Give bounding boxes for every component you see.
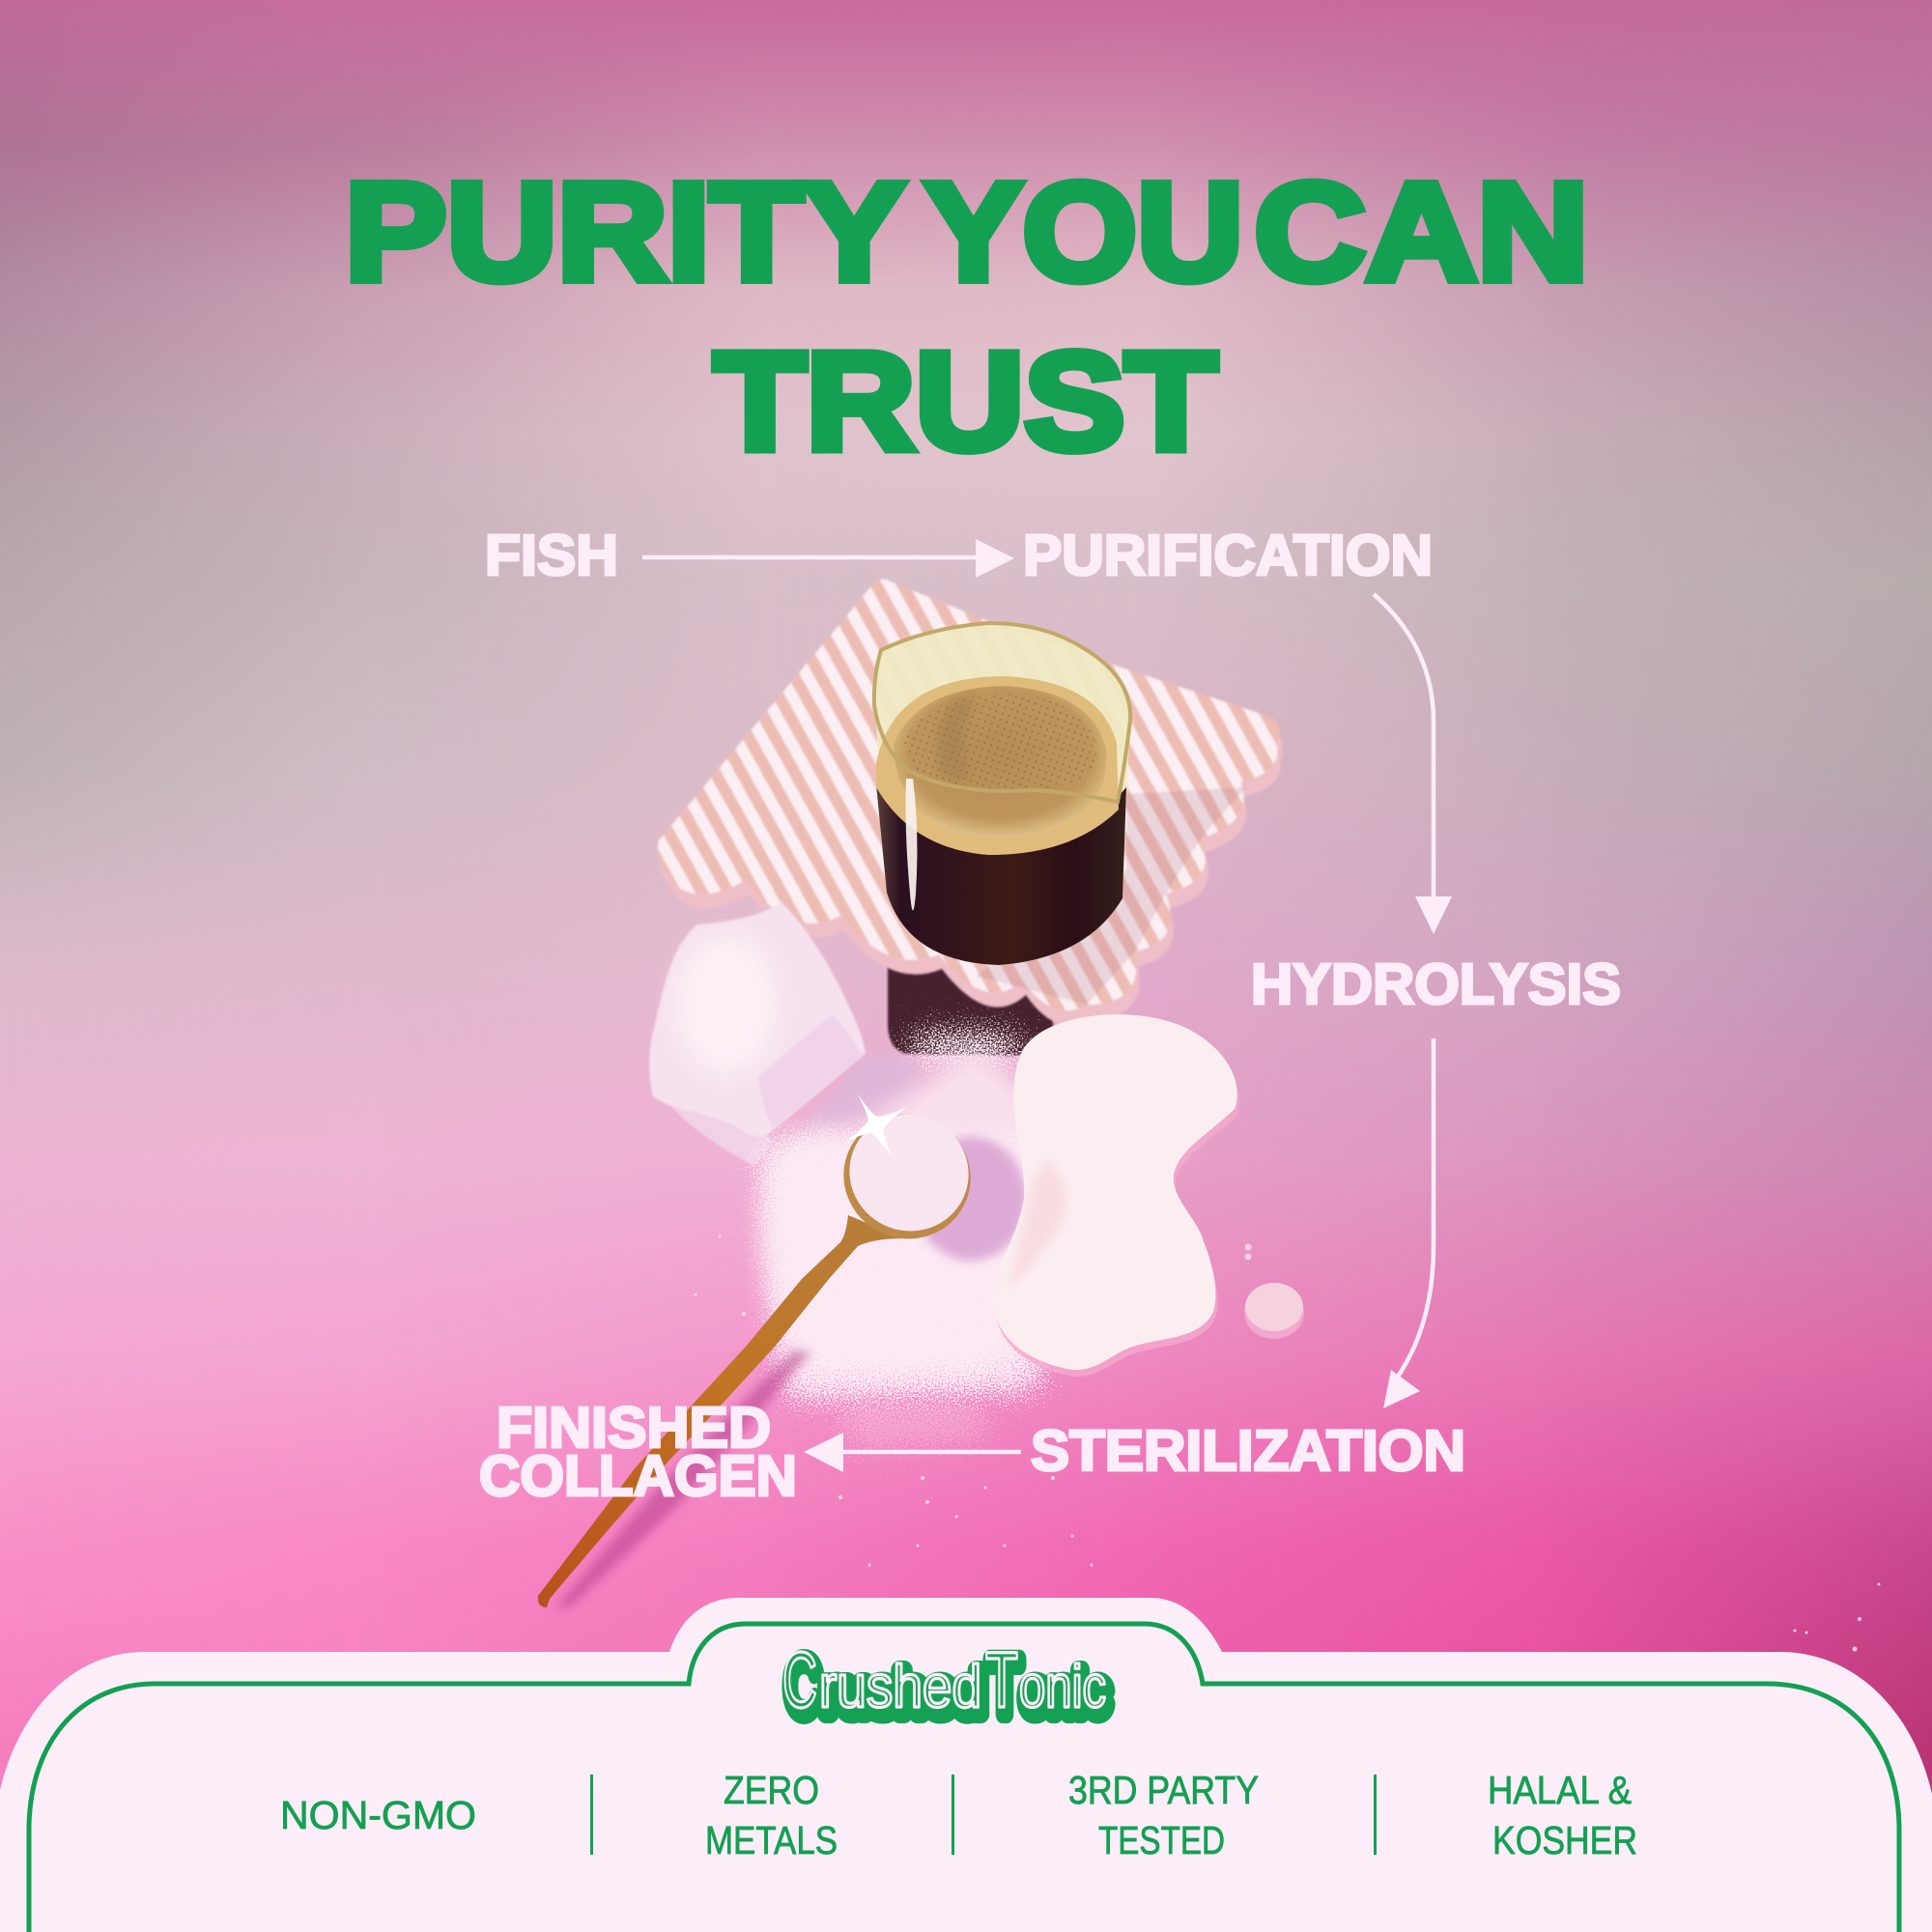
panel outline bbox=[29, 1624, 1899, 1932]
copper spoon bbox=[538, 1094, 991, 1607]
title bbox=[345, 155, 1588, 479]
blob shadow bbox=[787, 1055, 918, 1150]
title: TRUST bbox=[714, 324, 1217, 479]
logo: rushed bbox=[822, 1661, 984, 1727]
milk puddle bbox=[993, 1014, 1239, 1377]
badge: 3rd party tested bbox=[1068, 1768, 1259, 1862]
logo: T bbox=[985, 1636, 1018, 1724]
spoon shadow bbox=[555, 1137, 1027, 1607]
step: purification: PURIFICATION bbox=[1023, 524, 1433, 587]
badge: zero metals: ZERO bbox=[724, 1768, 819, 1812]
step: finished collagen bbox=[479, 1396, 797, 1508]
badge: halal and kosher bbox=[1488, 1768, 1637, 1862]
logo: C bbox=[782, 1636, 817, 1724]
small milk drop bbox=[1244, 1244, 1304, 1339]
shadow on coaster bbox=[976, 787, 1246, 1005]
title: PURITY bbox=[345, 155, 905, 309]
step: finished collagen: COLLAGEN bbox=[479, 1444, 797, 1508]
badge: 3rd party tested: TESTED bbox=[1098, 1818, 1225, 1862]
step: finished collagen: FINISHED bbox=[497, 1396, 771, 1460]
scattered powder grains bbox=[694, 1235, 1880, 1652]
badge: zero metals bbox=[705, 1768, 838, 1862]
arrow: purification to hydrolysis bbox=[1374, 594, 1452, 934]
panel: certifications bbox=[0, 1598, 1932, 1932]
badge: halal and kosher: HALAL & bbox=[1488, 1768, 1632, 1812]
step: hydrolysis: HYDROLYSIS bbox=[1251, 952, 1621, 1016]
title: CAN bbox=[1254, 155, 1588, 309]
upper glass bbox=[875, 623, 1130, 965]
arrow: sterilization to finished collagen bbox=[804, 1433, 1021, 1472]
badge: halal and kosher: KOSHER bbox=[1492, 1818, 1637, 1862]
logo: T bbox=[988, 1643, 1021, 1731]
step: sterilization: STERILIZATION bbox=[1031, 1419, 1465, 1483]
title: YOU bbox=[924, 155, 1243, 309]
badge: zero metals: METALS bbox=[705, 1818, 838, 1862]
badge: non-gmo: NON-GMO bbox=[280, 1793, 476, 1837]
logo: rushed bbox=[819, 1654, 981, 1720]
logo bbox=[782, 1636, 1109, 1731]
badge: 3rd party tested: 3RD PARTY bbox=[1068, 1768, 1259, 1812]
whipped cream blob bbox=[649, 902, 866, 1166]
step: fish: FISH bbox=[485, 524, 618, 587]
powder spill bbox=[749, 1053, 1053, 1459]
arrow: hydrolysis to sterilization bbox=[1383, 1038, 1434, 1408]
dark reflection under glass bbox=[888, 952, 1053, 1072]
panel background bbox=[0, 1598, 1932, 1932]
logo: onic bbox=[1019, 1654, 1106, 1720]
logo: C bbox=[785, 1643, 820, 1731]
glass rim bbox=[874, 623, 1130, 802]
logo: onic bbox=[1022, 1661, 1109, 1727]
glass beaker with coffee bbox=[874, 623, 1130, 965]
glass highlight bbox=[906, 779, 917, 910]
dark coffee bbox=[876, 784, 1126, 965]
photo: collagen still life bbox=[538, 580, 1880, 1652]
striped scalloped coaster bbox=[658, 580, 1283, 1025]
arrow: fish to purification bbox=[642, 539, 1014, 578]
sparkle bbox=[843, 1093, 907, 1156]
foam bbox=[876, 676, 1119, 855]
